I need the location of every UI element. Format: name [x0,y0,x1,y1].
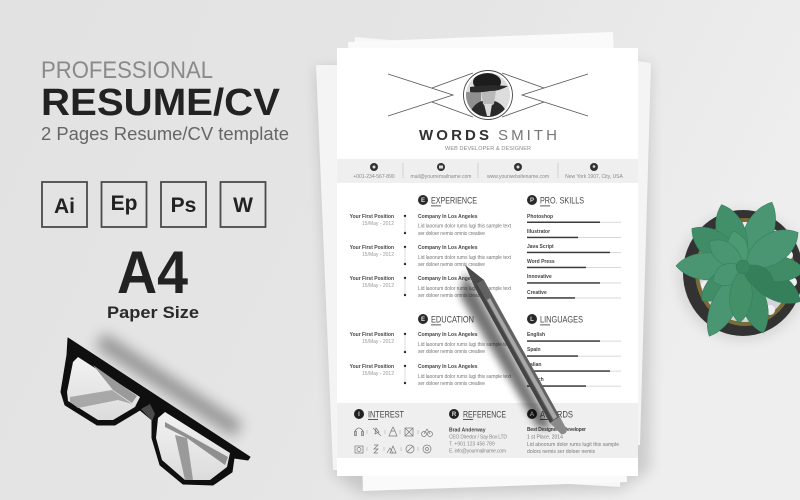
name [419,127,557,144]
subheading: 2 Pages Resume/CV template [41,124,289,144]
education section [350,314,512,387]
awards block: 1 st Place, 2014 [527,434,563,440]
pro skills section [527,195,621,299]
experience item 1: Your First Position [350,214,394,220]
sheet: right [636,61,651,445]
pen body [474,280,560,423]
left text block [41,57,289,144]
experience item 3: Company In Los Angeles [418,276,478,282]
experience item 1 [350,214,512,237]
pen dark edge [474,284,553,423]
pro skills heading: PRO. SKILLS [540,196,584,206]
right lens reflection [165,422,228,465]
awards block: Lid aboorum dolor rums lugit this sample [527,442,619,448]
glasses [61,338,250,485]
education item 2 [350,364,512,387]
glasses shadow [100,340,238,430]
experience item 2 [350,245,512,268]
reference block: REFERENCE [463,410,506,420]
languages heading [527,314,583,325]
pen [460,265,567,434]
awards block: A [530,412,535,418]
sheet shadow [316,64,650,494]
left lens reflection [93,365,137,403]
education item 1: Company In Los Angeles [418,332,478,338]
crossing lines [388,73,588,117]
education heading [418,314,474,325]
contact: location: New York 1907, City, USA [565,174,624,180]
badge: Ai [42,182,87,227]
pebbles [699,222,797,322]
page background [337,48,638,476]
left lens [67,357,140,420]
experience item 2: Lid laoorum dolor rums lugi this sample text [418,255,512,261]
interest icons [354,427,432,453]
awards block: AWARDS [540,410,573,420]
awards block: dolors nemis ser doloer nemis [527,449,596,455]
badge: Ps [161,182,206,227]
skill: word press: Word Press [527,259,555,265]
contact: web [487,163,549,180]
reference block: Brad Anderway [449,428,486,434]
skill: illustrator: Illustrator [527,229,550,235]
contact: email: mail@yourremailname.com [411,174,471,180]
contact: web: www.yourwebsitename.com [487,174,549,180]
experience section [350,195,512,299]
experience item 1: Company In Los Angeles [418,214,478,220]
heading: professional: PROFESSIONAL [41,57,213,84]
name: WORDS [419,127,489,144]
experience item 3: 15/May - 2012 [362,283,394,289]
pot shadow [680,213,800,339]
header graphic [388,70,588,120]
education item 1: Lid laoorum dolor rums lugi this sample text [418,342,512,348]
pot rim [683,210,800,336]
experience item 3: Your First Position [350,276,394,282]
badge: W: W [233,194,253,217]
reference block [449,409,507,454]
experience item 1: Lid laoorum dolor rums lugi this sample text [418,224,512,230]
education item 2: Your First Position [350,364,394,370]
experience heading: EXPERIENCE [431,196,477,206]
experience item 3: Lid laoorum dolor rums lugi this sample text [418,286,512,292]
education heading: E [421,317,425,323]
education item 2: ser doloer nemis omnis creative [418,381,485,387]
experience item 1: ser doloer nemis omnis creative [418,231,485,237]
interest heading: INTEREST [368,410,404,420]
sheet: left [316,65,340,470]
languages section [527,314,621,387]
education item 2: Company In Los Angeles [418,364,478,370]
badge: Ep: Ep [111,192,137,215]
back paper sheets [316,32,651,494]
experience item 2: ser doloer nemis omnis creative [418,262,485,268]
reference block: T. +901 123 456 789 [449,442,495,448]
portrait [464,70,512,120]
pro skills heading [527,195,584,206]
badge: Ep [102,182,146,227]
language: english: English [527,332,545,338]
experience item 2: Company In Los Angeles [418,245,478,251]
contact: phone: +001-234-567-890 [353,174,395,180]
A4 label: A4 [117,239,189,306]
education item 1 [350,332,512,355]
pen shadow [460,272,552,428]
left temple arm [70,390,132,408]
job title: WEB DEVELOPER & DESIGNER [445,146,531,152]
experience heading [418,195,477,206]
education item 2: 15/May - 2012 [362,371,394,377]
education item 1: 15/May - 2012 [362,339,394,345]
experience item 3: ser doloer nemis omnis creative [418,293,485,299]
reference block: R [452,412,457,418]
software badges [42,182,266,227]
paper size [107,239,199,322]
soil ring [695,218,795,326]
heading: resume cv: RESUME/CV [41,82,281,124]
skill: photoshop: Photoshop [527,214,553,220]
contact band [337,159,638,183]
badge: W [220,182,266,227]
plant [676,196,800,342]
badge: Ps: Ps [171,194,196,217]
pen highlight [487,298,557,420]
footer band [337,403,638,458]
skill: innovative: Innovative [527,274,552,280]
education item 1: ser doloer nemis omnis creative [418,349,485,355]
sheet: top left rotated [335,37,640,487]
pen tip [465,265,484,286]
languages heading: L [530,317,534,323]
frame with lens openings [61,338,250,485]
right temple arm [175,435,193,480]
language tracks [527,341,621,387]
awards block: Best Designer & Developer [527,427,586,433]
experience item 2: Your First Position [350,245,394,251]
interest heading [354,409,404,420]
name: SMITH [498,127,557,144]
experience item 2: 15/May - 2012 [362,252,394,258]
contact: location [565,163,624,180]
main resume page [337,48,638,476]
sheet: top right rotated [348,32,627,491]
pro skills heading: P [530,198,534,204]
experience item 3 [350,276,512,299]
skill tracks [527,222,621,298]
badge: Ai: Ai [54,195,75,218]
language: italian: Italian [527,362,541,368]
experience heading: E [421,198,425,204]
bridge [141,404,155,421]
reference block: CEO Director / Say Box LTD [449,434,507,440]
education heading: EDUCATION [431,314,474,324]
awards block [527,409,619,455]
skill: creative: Creative [527,290,547,296]
right lens [156,412,230,480]
experience item 1: 15/May - 2012 [362,221,394,227]
language: fourth bar: French [527,377,544,383]
leaves [676,196,800,342]
education item 2: Lid laoorum dolor rums lugi this sample text [418,374,512,380]
skill: java script: Java Script [527,244,554,250]
languages heading: LINGUAGES [540,314,583,324]
reference block: E. info@yourmailname.com [449,448,506,454]
contact: phone [353,163,395,180]
education item 1: Your First Position [350,332,394,338]
contact: email [411,163,471,180]
language: spain: Spain [527,347,541,353]
interest heading: I [358,412,360,418]
paper size label: Paper Size [107,303,199,322]
pen end cap [550,417,567,434]
